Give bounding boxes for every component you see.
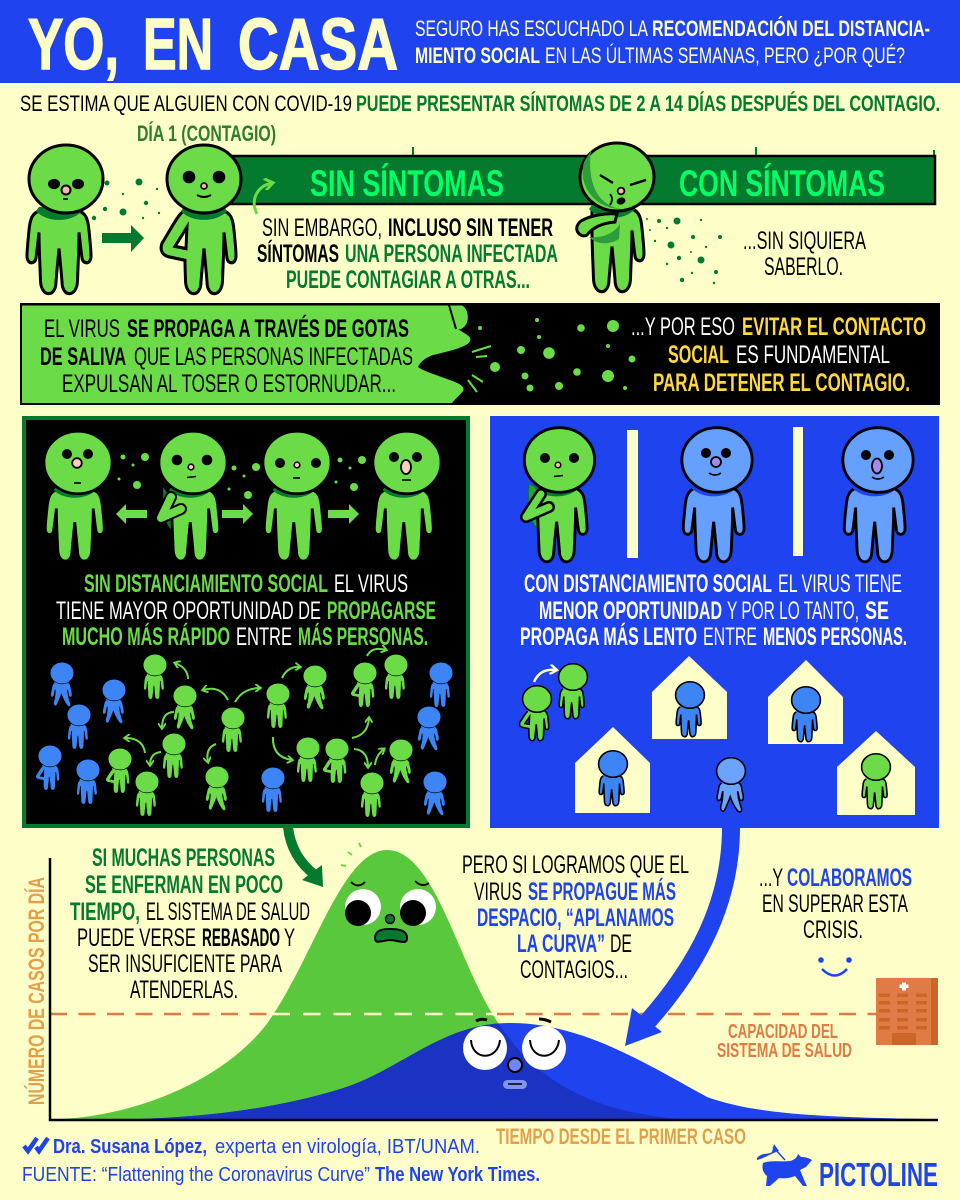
- cough lines: [468, 346, 491, 392]
- face silhouette: [22, 306, 470, 403]
- text: con distanciamiento: MENOR OPORTUNIDAD: [539, 597, 722, 625]
- arrow: from black panel to green curve: [288, 827, 323, 887]
- text: sin distanciamiento: MÁS PERSONAS.: [298, 622, 428, 651]
- curve overlap: [142, 1024, 678, 1119]
- footer credits: Dra. Susana López,: [53, 1136, 207, 1158]
- blue people at home: [599, 682, 820, 806]
- text: sin embargo: [257, 214, 558, 294]
- text: collaborate: [759, 864, 912, 944]
- droplets: cough: [646, 218, 722, 284]
- icon: smiley: [818, 957, 852, 976]
- text: many sick: SER INSUFICIENTE PARA: [88, 950, 282, 978]
- capacity line: white section: [272, 1013, 496, 1015]
- faces in the row: [62, 450, 422, 483]
- text: many sick: EL SISTEMA DE SALUD: [146, 898, 310, 926]
- text: sin embargo: PUEDE CONTAGIAR A OTRAS...: [286, 266, 530, 294]
- text: flatten: [462, 851, 689, 984]
- text: avoid contact: [631, 313, 926, 397]
- face: calm blue curve: [463, 1019, 566, 1089]
- text: many sick: SI MUCHAS PERSONAS: [92, 844, 275, 872]
- text: con distanciamiento: [520, 570, 907, 651]
- nose line: [449, 305, 456, 329]
- blue curve: [140, 1023, 925, 1119]
- text: collaborate: ...Y: [759, 864, 783, 892]
- logo: pictoline: [757, 1144, 938, 1193]
- arrow: contagion: [102, 225, 144, 252]
- text: sin siquiera saberlo: SABERLO.: [764, 253, 843, 281]
- barriers: [627, 427, 803, 558]
- header band: [0, 0, 960, 85]
- text: many sick: ATENDERLAS.: [130, 976, 238, 1004]
- text: flatten: CONTAGIOS...: [520, 956, 628, 984]
- person row: [524, 428, 913, 562]
- text: virus propagation: [40, 314, 413, 398]
- text: virus propagation: EL VIRUS: [44, 315, 120, 343]
- direction arrows: [116, 504, 359, 524]
- person: day 1: [161, 145, 241, 294]
- text: flatten: SE PROPAGUE MÁS: [528, 877, 676, 906]
- text: many sick: TIEMPO,: [70, 898, 140, 926]
- green curve: [60, 850, 680, 1119]
- incubation sentence: [20, 91, 940, 116]
- text: collaborate: CRISIS.: [803, 916, 863, 944]
- text: sin distanciamiento: [56, 570, 436, 651]
- text: virus propagation: QUE LAS PERSONAS INFECTADAS: [134, 343, 413, 371]
- title: EN: [143, 5, 213, 85]
- crowd: green people: [106, 654, 413, 817]
- incubation sentence: SE ESTIMA QUE ALGUIEN CON COVID-19: [20, 91, 352, 116]
- arrow: contagion between pair: [534, 670, 556, 682]
- text: flatten: PERO SI LOGRAMOS QUE EL: [462, 851, 689, 879]
- text: flatten: DE: [610, 930, 632, 958]
- droplets: [118, 453, 366, 499]
- houses: [575, 656, 915, 815]
- droplets: first contagion: [92, 178, 160, 220]
- footer credits: [22, 1136, 540, 1186]
- footer credits: experta en virología, IBT/UNAM.: [215, 1136, 480, 1158]
- intro text: MIENTO SOCIAL: [415, 43, 540, 68]
- intro text: [415, 16, 930, 68]
- chart: flatten the curve: [24, 843, 938, 1149]
- text: flatten: LA CURVA”: [517, 930, 605, 958]
- person row: [44, 431, 441, 561]
- axes: [50, 858, 938, 1120]
- text: many sick: REBASADO: [202, 924, 280, 952]
- droplets: [478, 318, 636, 392]
- text: con distanciamiento: PROPAGA MÁS LENTO: [520, 622, 697, 651]
- title: CASA: [238, 5, 398, 85]
- text: con distanciamiento: CON DISTANCIAMIENTO SOCIAL: [524, 570, 772, 598]
- label: health capacity: SISTEMA DE SALUD: [717, 1040, 852, 1062]
- text: flatten: VIRUS: [474, 878, 522, 906]
- panel: with social distancing: [490, 416, 939, 828]
- text: con distanciamiento: SE: [865, 597, 889, 625]
- label: health capacity: CAPACIDAD DEL: [728, 1021, 838, 1043]
- faces in the row: [540, 448, 894, 479]
- green person at home: [862, 754, 890, 809]
- text: avoid contact: ES FUNDAMENTAL: [736, 341, 890, 369]
- text: many sick: PUEDE VERSE: [77, 924, 196, 952]
- text: sin embargo: UNA PERSONA INFECTADA: [345, 240, 558, 268]
- text: sin distanciamiento: SIN DISTANCIAMIENTO SOCIAL: [84, 570, 328, 598]
- capacity line: orange: [50, 1013, 876, 1015]
- intro text: SEGURO HAS ESCUCHADO LA: [415, 16, 648, 41]
- text: sin distanciamiento: ENTRE: [236, 623, 292, 651]
- icon: hospital: [876, 978, 938, 1045]
- label: sin síntomas: SIN SÍNTOMAS: [310, 163, 504, 204]
- person: infected source: [27, 145, 103, 294]
- walking person outside: [717, 758, 745, 812]
- text: flatten: DESPACIO, “APLANAMOS: [477, 904, 674, 932]
- label: día 1: DÍA 1 (CONTAGIO): [137, 121, 276, 146]
- text: sin embargo: SÍNTOMAS: [257, 239, 339, 268]
- crowd: spread arrows: [125, 649, 386, 767]
- text: con distanciamiento: ENTRE: [703, 623, 757, 651]
- text: virus propagation: SE PROPAGA A TRAVÉS DE GOTAS: [127, 314, 409, 343]
- text: avoid contact: ...Y POR ESO: [631, 313, 735, 341]
- text: sin distanciamiento: PROPAGARSE: [327, 597, 436, 625]
- text: many sick: SE ENFERMAN EN POCO: [85, 871, 283, 899]
- text: sin distanciamiento: TIENE MAYOR OPORTUNIDAD DE: [56, 597, 321, 625]
- timeline bar: [215, 147, 935, 204]
- text: sin embargo: INCLUSO SIN TENER: [388, 214, 553, 242]
- label: health capacity: [717, 1021, 852, 1062]
- text: many sick: [70, 844, 310, 1004]
- footer credits: The New York Times.: [375, 1164, 540, 1186]
- y-axis label: NÚMERO DE CASOS POR DÍA: [24, 877, 49, 1105]
- text: avoid contact: SOCIAL: [668, 341, 729, 369]
- text: virus propagation: EXPULSAN AL TOSER O ESTORNUDAR...: [62, 370, 396, 398]
- title: YO,: [28, 5, 119, 85]
- label: con síntomas: CON SÍNTOMAS: [679, 163, 885, 204]
- text: con distanciamiento: Y POR LO TANTO,: [727, 597, 859, 625]
- icon: checkmarks: [24, 1138, 48, 1151]
- face: worried green curve: [341, 843, 436, 942]
- arrow: from blue panel to blue curve: [625, 827, 731, 1046]
- green pair: [519, 664, 587, 741]
- text: sin distanciamiento: MUCHO MÁS RÁPIDO: [62, 622, 230, 651]
- x-axis label: TIEMPO DESDE EL PRIMER CASO: [496, 1124, 746, 1149]
- person: coughing: [577, 143, 654, 292]
- arrow: curved light green: [254, 183, 272, 214]
- footer credits: FUENTE: “Flattening the Coronavirus Curve”: [22, 1164, 370, 1186]
- text: virus propagation: DE SALIVA: [40, 343, 126, 371]
- text: sin siquiera saberlo: [743, 227, 866, 281]
- text: many sick: Y: [284, 924, 295, 952]
- panel: without social distancing: [24, 418, 468, 826]
- text: sin embargo: SIN EMBARGO,: [262, 214, 382, 242]
- crowd: blue people: [36, 662, 453, 816]
- text: sin siquiera saberlo: ...SIN SIQUIERA: [743, 227, 866, 255]
- text: sin distanciamiento: EL VIRUS: [334, 570, 408, 598]
- panel: saliva band: [20, 303, 940, 405]
- title: [28, 5, 398, 85]
